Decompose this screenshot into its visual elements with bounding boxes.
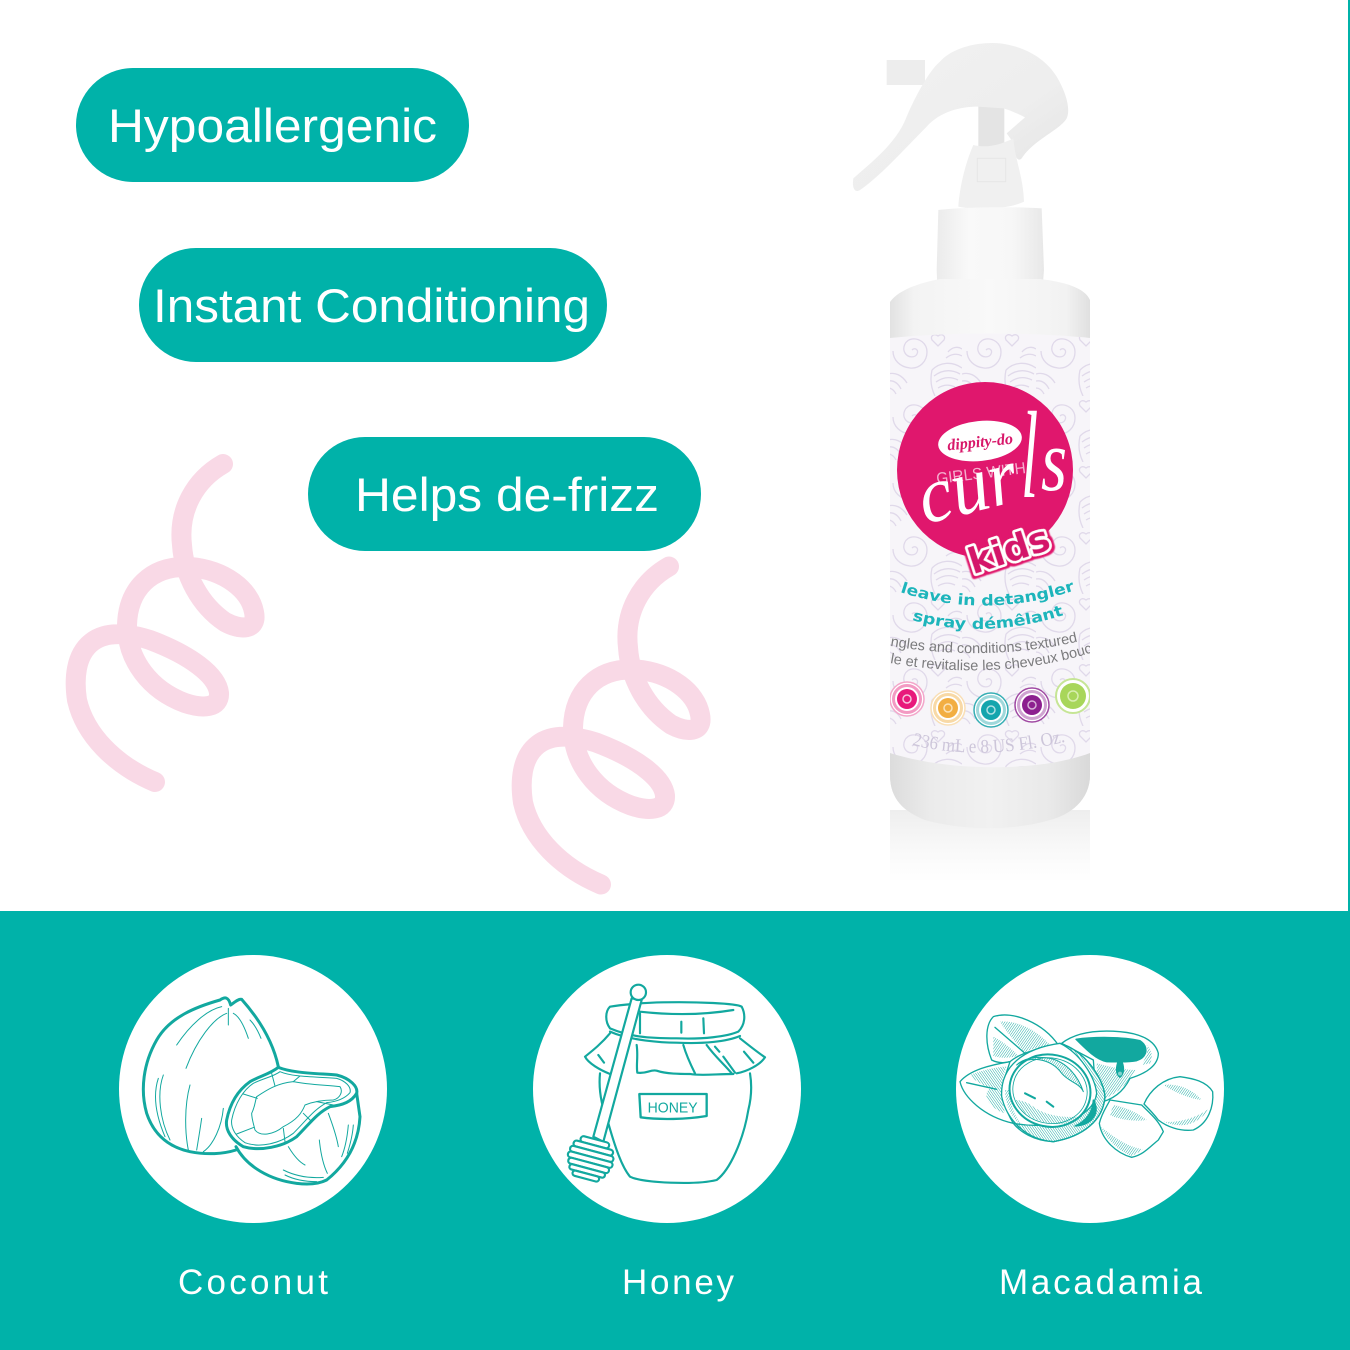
- pill: Helps de-frizz: Helps de-frizz: [355, 468, 659, 521]
- decorative pink curl, left: [76, 464, 255, 782]
- bottle reflection: [890, 810, 1090, 882]
- decorative pink curl, centre: [522, 566, 701, 884]
- dippity-do oval logo: dippity-do: [947, 431, 1014, 454]
- pill: Instant Conditioning: [139, 248, 607, 362]
- description text: Detangles and conditions textured: [890, 632, 1077, 654]
- kids sticker: kids: [963, 518, 1055, 583]
- description text: Démêle et revitalise les cheveux bouclés: [890, 646, 1090, 670]
- ingredient circle: coconut: [119, 955, 387, 1223]
- label with swirl pattern: [890, 334, 1090, 767]
- right edge accent line: [1348, 0, 1350, 911]
- pink logo circle: [897, 382, 1073, 558]
- five benefit badges: [890, 679, 1090, 727]
- leave in detangler heading: leave in detangler: [901, 582, 1073, 606]
- pill: Helps de-frizz: [308, 437, 701, 551]
- curls script logo: cur: [908, 432, 1027, 541]
- neck collar: [937, 207, 1044, 287]
- icon: honey jar with dipper: [563, 985, 765, 1185]
- spray demelant heading: spray démêlant: [913, 606, 1064, 632]
- curls script logo: s: [1041, 413, 1067, 510]
- ingredient circle: honey: [533, 955, 801, 1223]
- label: Coconut: Coconut: [178, 1263, 328, 1302]
- label: Honey: Honey: [622, 1263, 734, 1302]
- volume text: 236 mL e 8 US Fl. Oz.: [912, 733, 1064, 753]
- icon: coconut: [143, 998, 360, 1184]
- pill: Hypoallergenic: Hypoallergenic: [108, 99, 437, 152]
- spray trigger head: [853, 43, 1068, 209]
- pill: Hypoallergenic: [76, 68, 469, 182]
- icon: macadamia nuts and leaves: [960, 1015, 1213, 1157]
- product bottle: [853, 43, 1090, 842]
- description text: [890, 632, 1090, 670]
- Girls With text: GIRLS WITH: [935, 460, 1027, 488]
- bottom teal panel: [0, 911, 1350, 1350]
- icon: honey jar with dipper: HONEY: [648, 1101, 698, 1117]
- lower bottle base shading: [890, 752, 1090, 828]
- bottle body: [890, 279, 1090, 828]
- curls script logo: l: [1021, 388, 1038, 525]
- curls script logo: [908, 388, 1067, 541]
- pill: Instant Conditioning: Instant Conditioning: [153, 279, 590, 332]
- dippity-do oval logo: [936, 417, 1024, 465]
- label: Macadamia: Macadamia: [999, 1263, 1203, 1302]
- ingredient circle: macadamia: [956, 955, 1224, 1223]
